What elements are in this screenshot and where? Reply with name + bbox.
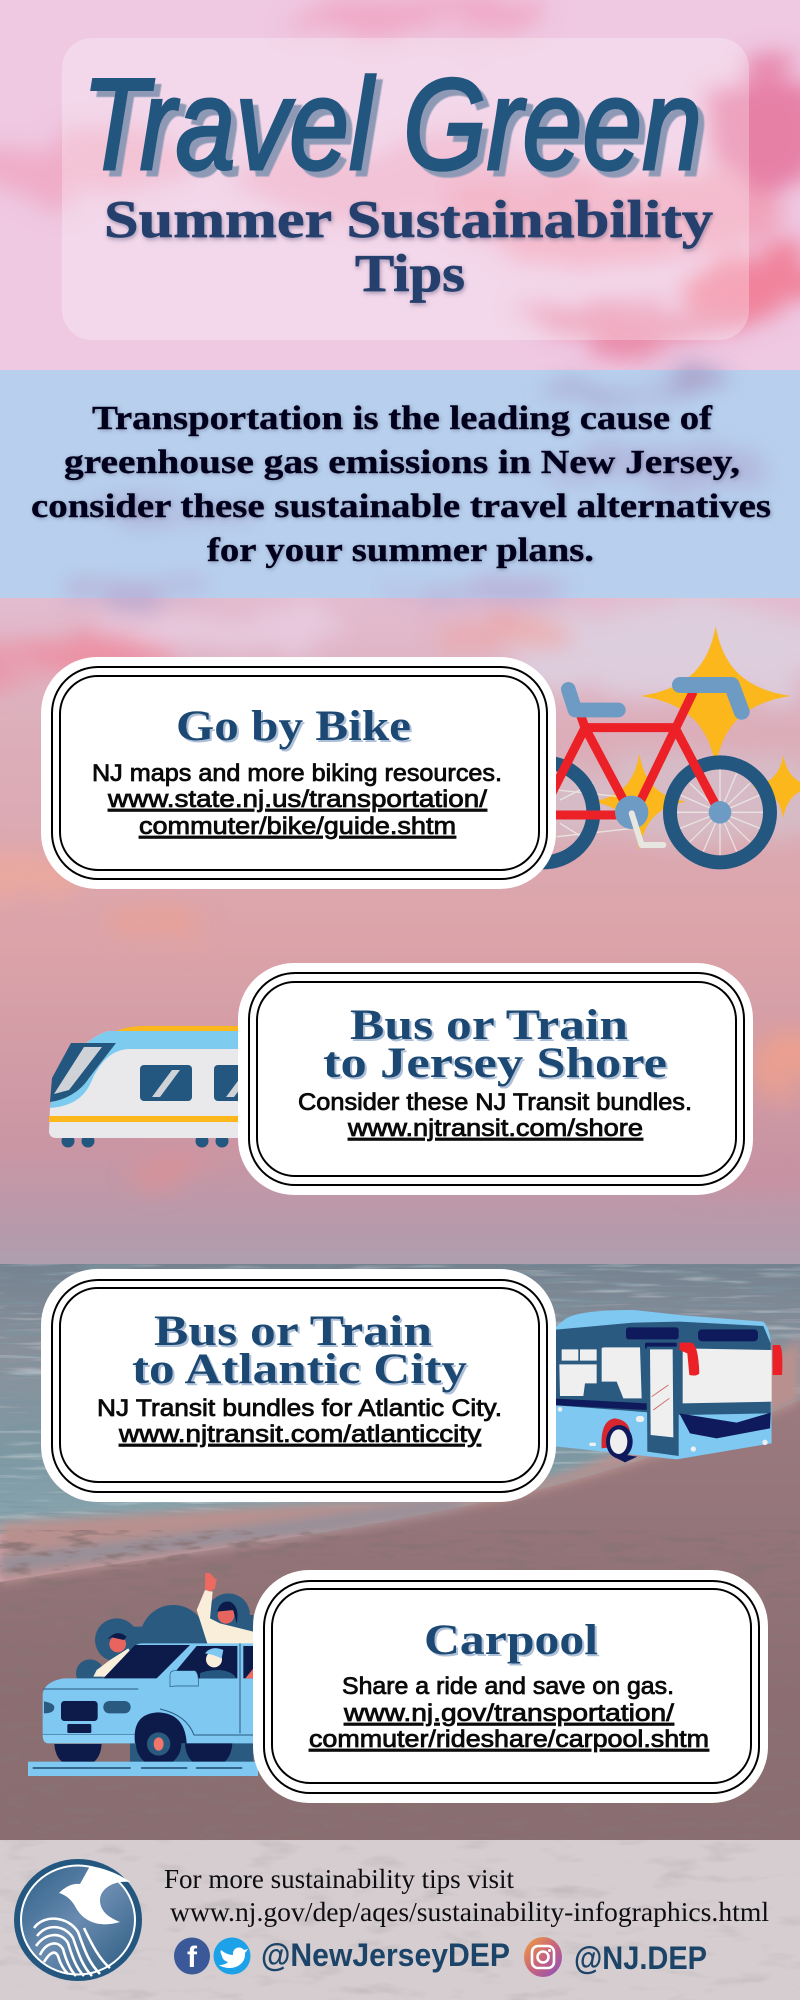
icon: Instagram: [524, 1937, 562, 1977]
band: pink title background: [0, 0, 800, 370]
text: carpool resources: www.nj.gov/transportation/: [343, 1700, 674, 1727]
icon: Facebook: [174, 1938, 210, 1974]
title panel: [62, 38, 749, 340]
footer text: www.nj.gov/dep/aqes/sustainability-infographics.html: [170, 1897, 769, 1927]
heading: Bus or Train to Atlantic City: Bus or Train: [154, 1308, 432, 1355]
footer text: For more sustainability tips visit: [164, 1864, 514, 1894]
text: bike resources: [92, 760, 502, 840]
subtitle: Summer Sustainability: [104, 191, 713, 249]
footer text: [164, 1864, 769, 1927]
icon: Twitter: [214, 1938, 250, 1974]
footer band: [0, 1840, 800, 2000]
background: sunset beach photo: [0, 598, 800, 2000]
card: Bus or Train to Atlantic City: [41, 1269, 556, 1502]
card: Bus or Train to Jersey Shore: [238, 963, 753, 1195]
icon: bicycle with sparkles: [493, 626, 800, 862]
intro text: greenhouse gas emissions in New Jersey,: [64, 444, 740, 481]
text: shore bundles: www.njtransit.com/shore: [347, 1115, 643, 1142]
subtitle: Tips: [355, 245, 465, 303]
heading: Bus or Train to Jersey Shore: Bus or Train: [350, 1002, 628, 1049]
icon: bus: [552, 1310, 782, 1462]
text: shore bundles: Consider these NJ Transit bundles.: [298, 1089, 692, 1116]
heading: Bus or Train to Atlantic City: [132, 1308, 468, 1393]
card: Carpool: [253, 1570, 768, 1803]
text: Atlantic City bundles: [97, 1395, 502, 1448]
text: bike resources: commuter/bike/guide.shtm: [139, 813, 456, 840]
text: carpool resources: Share a ride and save on gas.: [342, 1673, 674, 1700]
text: carpool resources: commuter/rideshare/carpool.shtm: [309, 1726, 709, 1753]
card: Go by Bike: [41, 657, 556, 889]
handle: @NewJerseyDEP: @NewJerseyDEP: [261, 1937, 510, 1973]
text: Atlantic City bundles: NJ Transit bundles for Atlantic City.: [97, 1395, 502, 1422]
handle: @NJ.DEP: @NJ.DEP: [574, 1940, 707, 1976]
intro text: consider these sustainable travel alternatives: [31, 488, 771, 525]
text: carpool resources: [309, 1673, 709, 1753]
heading: Bus or Train to Jersey Shore: [323, 1002, 667, 1087]
text: Atlantic City bundles: www.njtransit.com/atlanticcity: [118, 1421, 481, 1448]
heading: Bus or Train to Atlantic City: to Atlantic City: [132, 1346, 468, 1393]
text: bike resources: NJ maps and more biking resources.: [92, 760, 502, 787]
heading: Bus or Train to Jersey Shore: to Jersey Shore: [323, 1040, 667, 1087]
heading: Carpool: Carpool: [424, 1617, 598, 1664]
subtitle: [104, 191, 713, 303]
intro text: for your summer plans.: [207, 532, 594, 569]
text: bike resources: www.state.nj.us/transportation/: [107, 786, 487, 813]
text: shore bundles: [298, 1089, 692, 1142]
intro text: [31, 400, 771, 569]
icon: Facebook: f: [187, 1941, 198, 1974]
icon: NJDEP logo: [14, 1859, 142, 1981]
icon: train: [49, 1026, 254, 1148]
icon: carpool car with passengers: [28, 1573, 258, 1776]
band: blue intro background: [0, 370, 800, 600]
intro text: Transportation is the leading cause of: [92, 400, 713, 437]
heading: Go by Bike: Go by Bike: [176, 703, 411, 750]
